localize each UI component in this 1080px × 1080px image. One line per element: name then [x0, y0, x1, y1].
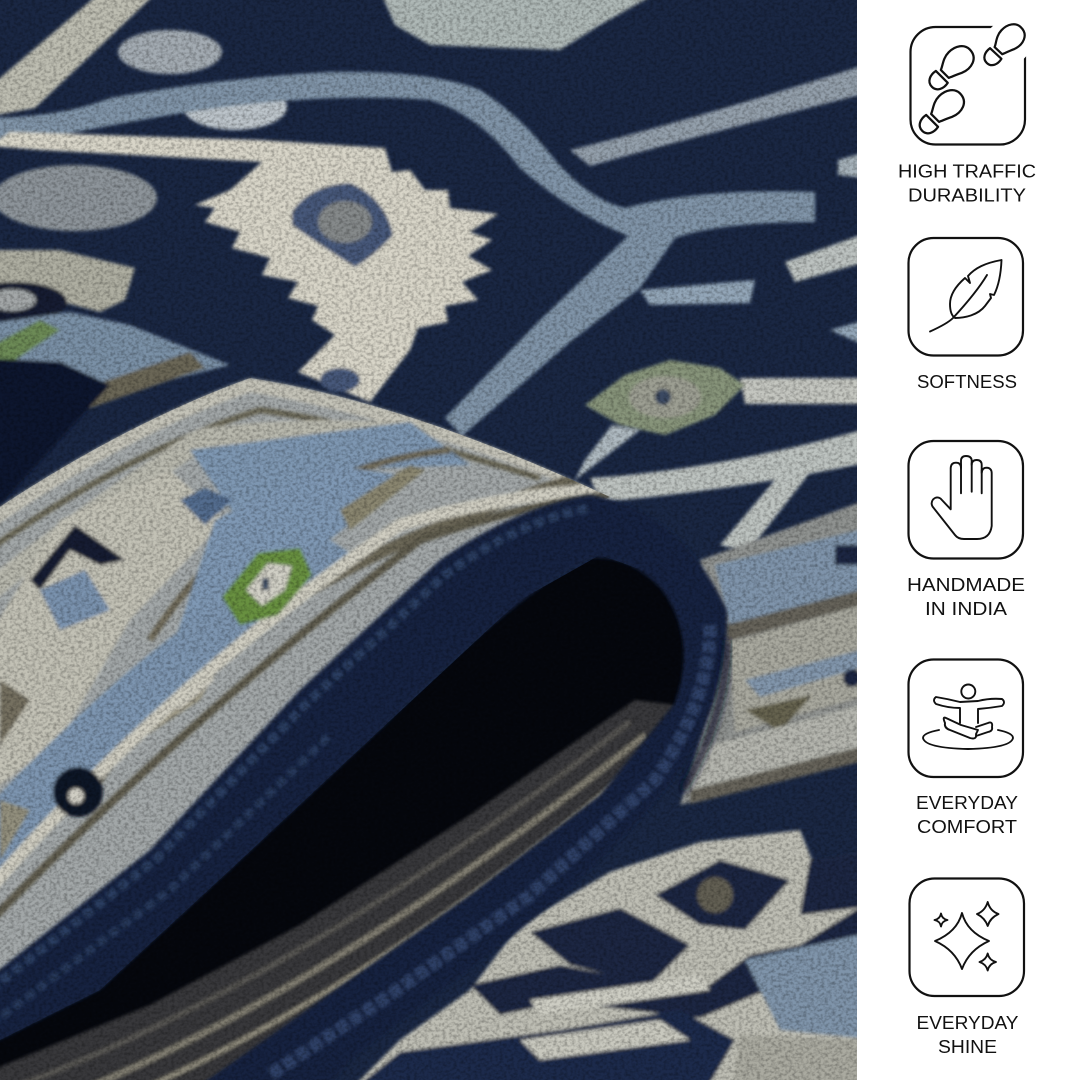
- rug pattern: right border band: [678, 501, 857, 806]
- icon: feather: [908, 238, 1023, 356]
- green medallion: [585, 360, 745, 435]
- rug pattern: lower cream motif: [340, 830, 880, 1080]
- feature: softness: [908, 238, 1023, 392]
- label: everyday shine: [916, 1013, 1018, 1057]
- woven texture overlay: [0, 0, 857, 1080]
- green knot: [222, 548, 312, 625]
- label: handmade in india: [907, 575, 1025, 619]
- rolled rug: underside with stitched backing: [0, 700, 675, 1080]
- icon: sparkles: [910, 878, 1024, 996]
- icon: raised hand: [908, 441, 1023, 558]
- label: handmade in india: HANDMADE: [907, 575, 1025, 595]
- feature: everyday shine: [910, 878, 1024, 1057]
- label: everyday comfort: [916, 793, 1018, 837]
- icon: footprints: [910, 11, 1039, 145]
- feature: high traffic durability: [898, 11, 1039, 206]
- label: everyday comfort: EVERYDAY: [916, 793, 1018, 813]
- label: high traffic durability: DURABILITY: [908, 186, 1026, 206]
- feature: handmade in india: [907, 441, 1025, 619]
- rolled rug: carpet face: [0, 378, 610, 1000]
- label: high traffic durability: [898, 162, 1036, 206]
- left cream and blue patches: [0, 250, 135, 312]
- label: everyday comfort: COMFORT: [917, 817, 1017, 837]
- label: everyday shine: EVERYDAY: [916, 1013, 1018, 1033]
- icon: meditating figure: [908, 660, 1023, 777]
- soft shadow under roll: [683, 640, 728, 790]
- rolled rug: navy selvedge binding: [0, 495, 727, 1080]
- rolled rug: dark inner hollow: [0, 555, 700, 1080]
- border stripes following the fold: [0, 385, 600, 528]
- label: softness: SOFTNESS: [917, 372, 1017, 392]
- feature: everyday comfort: [908, 660, 1023, 837]
- rug pattern: upper field: [0, 0, 880, 552]
- cream medallion: [0, 132, 498, 402]
- label: high traffic durability: HIGH TRAFFIC: [898, 162, 1036, 182]
- label: everyday shine: SHINE: [938, 1037, 997, 1057]
- panel: white feature column: [857, 0, 1080, 1080]
- label: handmade in india: IN INDIA: [925, 599, 1007, 619]
